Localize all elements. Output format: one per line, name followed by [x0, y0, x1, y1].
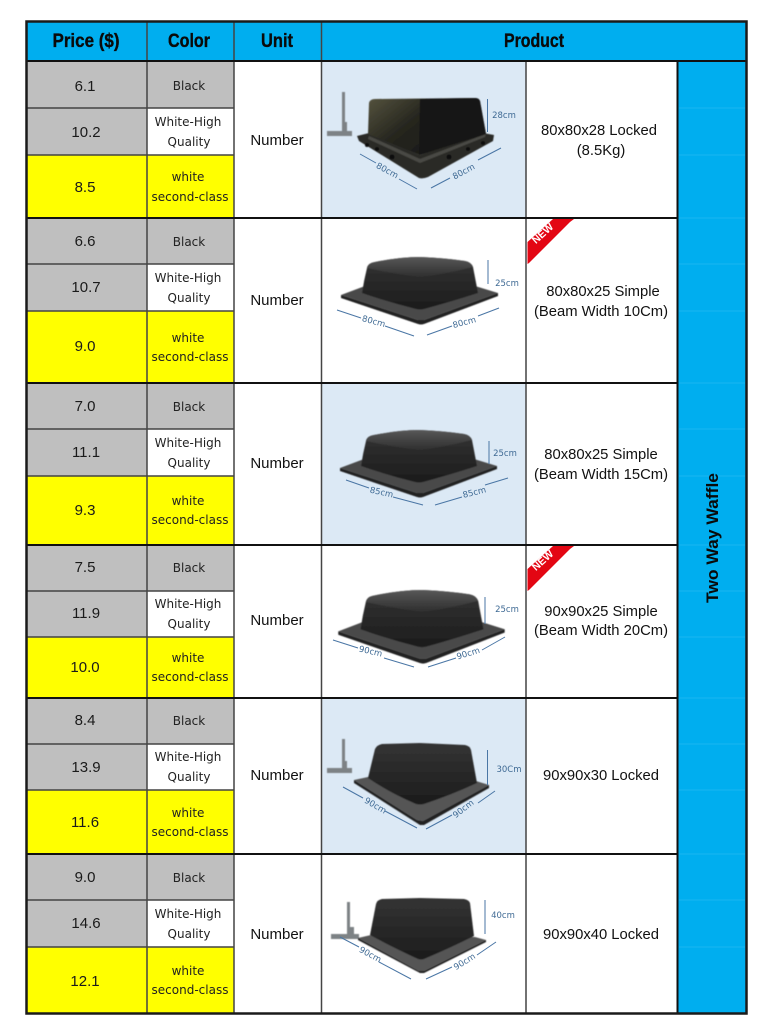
prices: 9.0 — [75, 869, 95, 886]
color options: Black — [173, 235, 205, 249]
color options: White-High — [155, 436, 221, 450]
prices: 10.7 — [71, 279, 101, 296]
product name: 90x90x40 Locked — [543, 927, 659, 943]
header row — [26, 21, 746, 61]
product name: (Beam Width 15Cm) — [534, 467, 668, 483]
product image: 80x80x28 locked form — [327, 92, 516, 189]
unit: Number — [250, 455, 304, 472]
color options: Quality — [168, 927, 210, 941]
prices — [70, 559, 100, 676]
color options — [152, 400, 228, 527]
prices: 11.9 — [72, 605, 100, 622]
product image: 80x80x25 simple form: 80cm — [361, 314, 386, 330]
prices: 11.1 — [72, 444, 100, 461]
product image: 85x85x25 simple form: 85cm — [462, 485, 487, 501]
product image: 80x80x25 simple form: 80cm — [452, 315, 477, 331]
color options: Quality — [168, 770, 210, 784]
prices: 6.1 — [75, 78, 95, 95]
color options: Black — [173, 79, 205, 93]
product image: 90x90x40 locked form: 90cm — [357, 945, 383, 965]
product image: 90x90x30 locked form: 90cm — [451, 798, 476, 821]
prices: 13.9 — [71, 759, 101, 776]
prices: 9.0 — [75, 338, 95, 355]
product image: 90x90x30 locked form: 90cm — [362, 796, 388, 817]
unit: Number — [250, 926, 304, 943]
header: unit: Unit — [261, 31, 294, 52]
row 6: 90x90x40 locked — [26, 855, 659, 1013]
product image: 85x85x25 simple form — [340, 430, 517, 505]
product name: (8.5Kg) — [577, 143, 625, 159]
color options: Quality — [168, 456, 210, 470]
header: color: Color — [168, 31, 211, 52]
color options — [152, 871, 228, 997]
color options: white — [172, 494, 204, 508]
product image: 90x90x30 locked form — [327, 739, 522, 829]
product image: 85x85x25 simple form: 85cm — [369, 486, 394, 500]
product image: 80x80x25 simple form: 25cm — [495, 279, 519, 289]
side panel: two way waffle — [678, 62, 746, 1013]
prices: 7.5 — [75, 559, 95, 576]
prices — [70, 869, 101, 990]
unit: Number — [250, 292, 304, 309]
color options: second-class — [152, 350, 228, 364]
color options: White-High — [155, 907, 221, 921]
color options: white — [172, 651, 204, 665]
color options: second-class — [152, 513, 228, 527]
color options — [152, 235, 228, 364]
product name: 80x80x25 Simple — [546, 284, 660, 300]
new ribbon — [528, 219, 574, 264]
color options: Black — [173, 561, 205, 575]
product name — [534, 447, 668, 483]
product image: 90x90x25 simple form: 90cm — [456, 646, 481, 662]
new ribbon — [528, 546, 574, 591]
header: product: Product — [504, 31, 565, 52]
product name: 90x90x30 Locked — [543, 768, 659, 784]
prices: 9.3 — [75, 502, 95, 519]
side panel: two way waffle: Two Way Waffle — [704, 473, 722, 603]
color options: second-class — [152, 825, 228, 839]
color options: White-High — [155, 271, 221, 285]
product image: 90x90x25 simple form — [333, 590, 519, 667]
row 2: 80x80x25 simple beam 10 — [26, 219, 668, 382]
unit: Number — [250, 767, 304, 784]
color options: Quality — [168, 291, 210, 305]
color options: white — [172, 964, 204, 978]
prices: 12.1 — [70, 973, 100, 990]
color options: Black — [173, 714, 205, 728]
row 3: 80x80x25 simple beam 15 — [26, 384, 668, 544]
new ribbon: NEW — [530, 548, 556, 573]
unit: Number — [250, 132, 304, 149]
product name: 90x90x25 Simple — [544, 604, 658, 620]
product name: 80x80x28 Locked — [541, 123, 657, 139]
row 1: 80x80x28 locked — [26, 62, 657, 217]
prices: 11.6 — [71, 814, 99, 831]
color options — [152, 79, 228, 204]
product name — [534, 604, 668, 639]
unit: Number — [250, 612, 304, 629]
product image: 80x80x28 locked form: 80cm — [451, 162, 477, 182]
color options: Black — [173, 400, 205, 414]
color options: Quality — [168, 135, 210, 149]
product image: 85x85x25 simple form: 25cm — [493, 449, 517, 459]
product name — [541, 123, 657, 159]
color options: second-class — [152, 670, 228, 684]
color options: White-High — [155, 597, 221, 611]
product image: 90x90x25 simple form: 25cm — [495, 605, 519, 615]
product image: 80x80x28 locked form: 28cm — [492, 111, 516, 121]
color options — [152, 561, 228, 684]
row 5: 90x90x30 locked — [26, 699, 659, 853]
color options: White-High — [155, 115, 221, 129]
product image: 90x90x30 locked form: 30Cm — [496, 765, 522, 775]
prices — [72, 398, 100, 519]
product image: 90x90x40 locked form — [331, 898, 515, 979]
color options — [152, 714, 228, 839]
row 4: 90x90x25 simple beam 20 — [26, 546, 668, 697]
prices — [71, 712, 101, 831]
new ribbon: NEW — [530, 221, 556, 246]
prices: 6.6 — [75, 233, 95, 250]
product image: 90x90x25 simple form: 90cm — [358, 645, 383, 660]
color options: Black — [173, 871, 205, 885]
prices — [71, 78, 101, 196]
product image: 80x80x25 simple form — [337, 257, 519, 336]
product name: 80x80x25 Simple — [544, 447, 658, 463]
prices: 10.2 — [71, 124, 101, 141]
header: price: Price ($) — [52, 31, 120, 52]
product name — [534, 284, 668, 320]
prices: 10.0 — [70, 659, 100, 676]
color options: white — [172, 806, 204, 820]
color options: second-class — [152, 983, 228, 997]
prices: 7.0 — [75, 398, 95, 415]
product image: 90x90x40 locked form: 40cm — [491, 911, 515, 921]
prices: 8.4 — [75, 712, 95, 729]
prices: 8.5 — [75, 179, 95, 196]
prices — [71, 233, 101, 355]
product image: 90x90x40 locked form: 90cm — [452, 952, 478, 973]
color options: White-High — [155, 750, 221, 764]
product name: (Beam Width 10Cm) — [534, 304, 668, 320]
color options: white — [172, 170, 204, 184]
color options: second-class — [152, 190, 228, 204]
prices: 14.6 — [71, 915, 101, 932]
product name: (Beam Width 20Cm) — [534, 623, 668, 639]
color options: Quality — [168, 617, 210, 631]
product image: 80x80x28 locked form: 80cm — [374, 161, 400, 181]
color options: white — [172, 331, 204, 345]
